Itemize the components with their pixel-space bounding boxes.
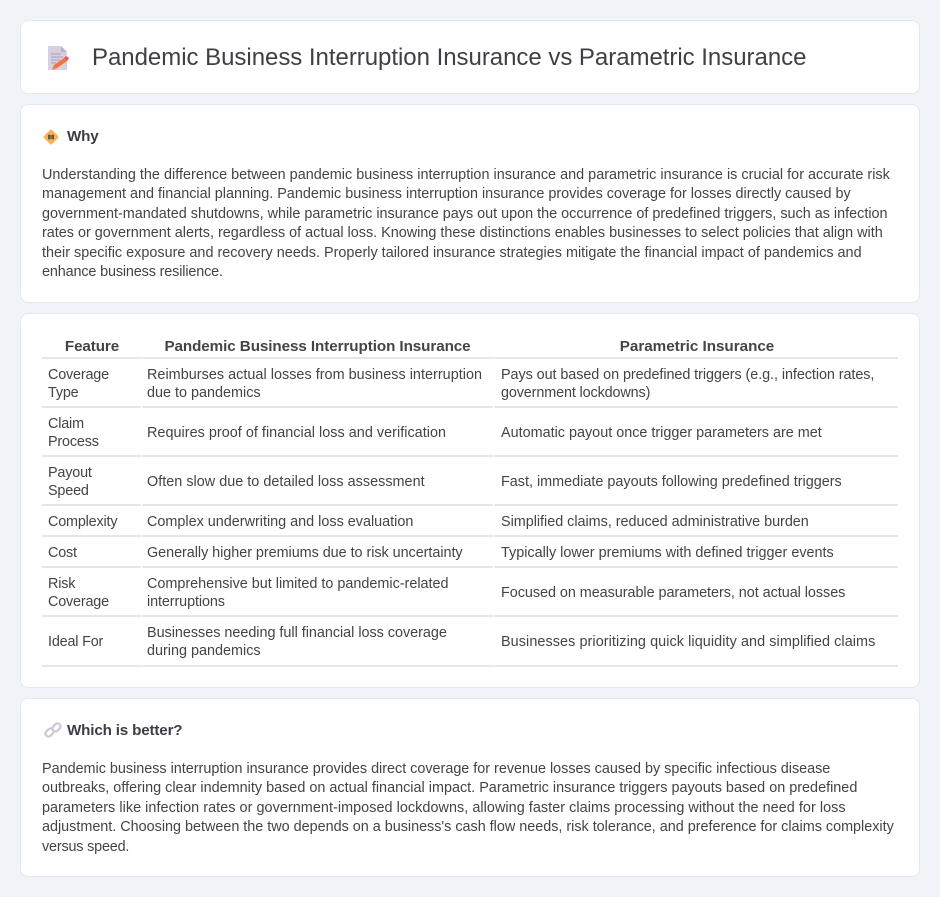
panel: which is better [20,698,920,877]
text block: why paragraph: their specific exposure and recovery needs. Properly tailored insurance strategies mitigate the financial impact of pandemics and [42,245,862,261]
row: risk coverage [48,576,845,610]
text block: which is better paragraph: parameters like infection rates or government-imposed lockdowns, allowing faster claims processing without the need for loss [42,800,846,816]
row: claim process: Claim [48,416,84,432]
row: ideal for: Businesses prioritizing quick liquidity and simplified claims [501,634,875,650]
icon: document with pencil [48,46,69,70]
row: cost: Cost [48,545,77,561]
text block: why paragraph: Understanding the difference between pandemic business interruption insurance and parametric insurance is crucial for accurate risk [42,167,890,183]
table header: Parametric Insurance [620,338,774,355]
row: coverage type: Type [48,385,78,401]
row: payout speed: Payout [48,465,92,481]
text block: which is better paragraph: outbreaks, offering clear indemnity based on actual financial impact. Parametric insurance triggers payouts based on predefined [42,780,857,796]
title: Pandemic Business Interruption Insurance vs Parametric Insurance [92,44,806,71]
row: risk coverage: Risk [48,576,75,592]
row: ideal for [48,625,875,659]
row: complexity [48,514,809,530]
row: risk coverage: Coverage [48,594,109,610]
text block: why paragraph: government-mandated shutdowns, while parametric insurance pays out upon the occurrence of predefined triggers, such as infection [42,206,888,222]
row: cost: Typically lower premiums with defined trigger events [501,545,834,561]
table header [65,338,774,355]
row: claim process: Automatic payout once trigger parameters are met [501,425,822,441]
text block: which is better paragraph: adjustment. Choosing between the two depends on a business's cash flow needs, risk tolerance, and preference for claims complexity [42,819,894,835]
icon: chain link [44,722,62,738]
row: coverage type: Pays out based on predefined triggers (e.g., infection rates, [501,367,874,383]
row: complexity: Complex underwriting and loss evaluation [147,514,413,530]
row: ideal for: during pandemics [147,643,261,659]
table header: Pandemic Business Interruption Insurance [164,338,471,355]
row: cost: Generally higher premiums due to risk uncertainty [147,545,463,561]
table header: Feature [65,338,119,355]
text block: which is better paragraph: Pandemic business interruption insurance provides direct coverage for revenue losses caused by specific infectious disease [42,761,830,777]
text block: why paragraph [42,167,890,280]
row: cost [48,545,834,561]
row: payout speed [48,465,842,499]
row: coverage type: government lockdowns) [501,385,650,401]
text block: which is better paragraph: versus speed. [42,839,129,855]
row: payout speed: Speed [48,483,89,499]
row: risk coverage: interruptions [147,594,225,610]
panel: comparison table [20,313,920,688]
text block: why paragraph: rates or government alerts, regardless of actual loss. Knowing these distinctions enables businesses to select policies that align with [42,225,883,241]
row: coverage type: due to pandemics [147,385,261,401]
row: ideal for: Ideal For [48,634,103,650]
row: claim process [48,416,822,450]
row: coverage type [48,367,874,401]
text block: why paragraph: management and financial planning. Pandemic business interruption insurance provides coverage for losses directly caused by [42,186,851,202]
row: complexity: Complexity [48,514,117,530]
row: coverage type: Coverage [48,367,109,383]
row: payout speed: Often slow due to detailed loss assessment [147,474,425,490]
panel: why [20,104,920,303]
row: ideal for: Businesses needing full financial loss coverage [147,625,447,641]
row: coverage type: Reimburses actual losses from business interruption [147,367,482,383]
text block: which is better paragraph [42,761,894,855]
row: risk coverage: Comprehensive but limited to pandemic-related [147,576,449,592]
icon: warning diamond [44,130,58,144]
row: risk coverage: Focused on measurable parameters, not actual losses [501,585,845,601]
panel: title header [20,20,920,94]
heading: why: Why [67,128,99,145]
row: claim process: Requires proof of financial loss and verification [147,425,446,441]
row: claim process: Process [48,434,99,450]
row: payout speed: Fast, immediate payouts following predefined triggers [501,474,842,490]
text block: why paragraph: enhance business resilience. [42,264,223,280]
row: complexity: Simplified claims, reduced administrative burden [501,514,809,530]
heading: which is better: Which is better? [67,722,182,739]
